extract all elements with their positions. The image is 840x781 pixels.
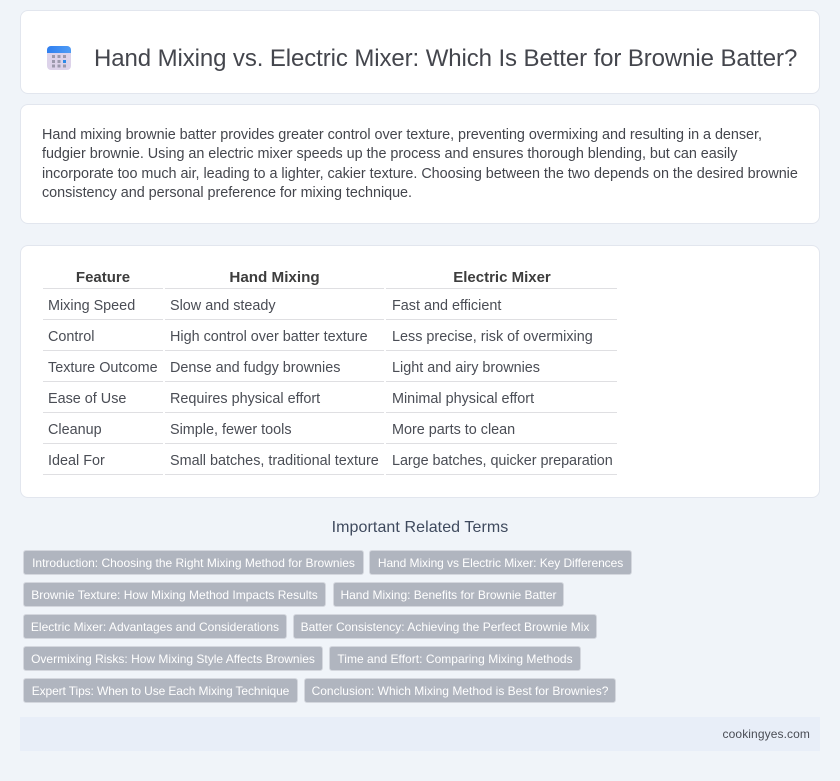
tag: Expert Tips: When to Use Each Mixing Technique bbox=[32, 684, 289, 698]
row: ease of use: Requires physical effort bbox=[170, 391, 320, 407]
row: control: Less precise, risk of overmixing bbox=[392, 329, 593, 345]
title: Hand Mixing vs. Electric Mixer: Which Is Better for Brownie Batter? bbox=[94, 45, 797, 72]
row: cleanup: More parts to clean bbox=[392, 422, 515, 438]
table headers: Electric Mixer bbox=[453, 269, 551, 286]
intro text panel bbox=[20, 104, 820, 224]
tag bbox=[23, 614, 287, 639]
table headers bbox=[76, 269, 551, 286]
row: mixing speed: Fast and efficient bbox=[392, 298, 501, 314]
tag: Hand Mixing vs Electric Mixer: Key Differences bbox=[378, 556, 623, 570]
tag bbox=[333, 582, 564, 607]
header card bbox=[20, 10, 820, 94]
tag: Conclusion: Which Mixing Method is Best for Brownies? bbox=[312, 684, 608, 698]
row: control bbox=[48, 329, 593, 345]
comparison table panel bbox=[20, 245, 820, 498]
row: mixing speed bbox=[48, 298, 502, 314]
tag: Brownie Texture: How Mixing Method Impacts Results bbox=[31, 588, 318, 602]
row: cleanup: Simple, fewer tools bbox=[170, 422, 292, 438]
table headers: Hand Mixing bbox=[229, 269, 320, 286]
tag bbox=[329, 646, 581, 671]
row: control: High control over batter texture bbox=[170, 329, 368, 345]
row: ideal for: Large batches, quicker preparation bbox=[392, 453, 613, 469]
row: ease of use bbox=[48, 391, 534, 407]
intro paragraph: fudgier brownie. Using an electric mixer speeds up the process and ensures thorough blending, but can easily bbox=[42, 146, 737, 162]
related terms heading: Important Related Terms bbox=[332, 519, 508, 536]
tag: Overmixing Risks: How Mixing Style Affects Brownies bbox=[31, 652, 315, 666]
row: texture outcome: Texture Outcome bbox=[48, 360, 158, 376]
intro paragraph: Hand mixing brownie batter provides greater control over texture, preventing overmixing and resulting in a denser, bbox=[42, 127, 762, 143]
icon: calendar bbox=[47, 46, 71, 70]
tag bbox=[23, 678, 298, 703]
tag bbox=[369, 550, 632, 575]
row: texture outcome bbox=[48, 360, 540, 376]
intro paragraph bbox=[42, 127, 798, 201]
row: ease of use: Minimal physical effort bbox=[392, 391, 534, 407]
row: control: Control bbox=[48, 329, 94, 345]
row: ideal for bbox=[48, 453, 613, 469]
tag bbox=[293, 614, 597, 639]
intro paragraph: consistency and personal preference for mixing technique. bbox=[42, 185, 412, 201]
tag: Hand Mixing: Benefits for Brownie Batter bbox=[340, 588, 557, 602]
tag bbox=[304, 678, 616, 703]
tag bbox=[23, 582, 326, 607]
source credit: cookingyes.com bbox=[723, 727, 810, 741]
tag: Batter Consistency: Achieving the Perfect Brownie Mix bbox=[301, 620, 589, 634]
row: ideal for: Small batches, traditional texture bbox=[170, 453, 379, 469]
row: ideal for: Ideal For bbox=[48, 453, 105, 469]
tag: Electric Mixer: Advantages and Considerations bbox=[31, 620, 279, 634]
row: texture outcome: Dense and fudgy brownies bbox=[170, 360, 340, 376]
row: cleanup bbox=[48, 422, 515, 438]
tag bbox=[23, 550, 364, 575]
row: cleanup: Cleanup bbox=[48, 422, 102, 438]
row: mixing speed: Mixing Speed bbox=[48, 298, 135, 314]
row: ease of use: Ease of Use bbox=[48, 391, 126, 407]
tag: Introduction: Choosing the Right Mixing Method for Brownies bbox=[32, 556, 355, 570]
tag bbox=[23, 646, 323, 671]
footer bar bbox=[20, 717, 820, 751]
intro paragraph: incorporate too much air, leading to a lighter, cakier texture. Choosing between the two depends on the desired brownie bbox=[42, 166, 798, 182]
tag: Time and Effort: Comparing Mixing Methods bbox=[337, 652, 573, 666]
related term tags bbox=[23, 550, 632, 703]
row: texture outcome: Light and airy brownies bbox=[392, 360, 540, 376]
row: mixing speed: Slow and steady bbox=[170, 298, 276, 314]
table headers: Feature bbox=[76, 269, 130, 286]
